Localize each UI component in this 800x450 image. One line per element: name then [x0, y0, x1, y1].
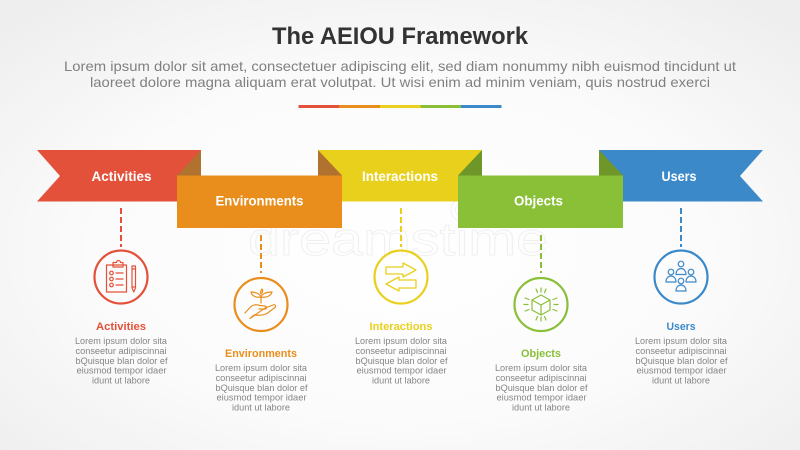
title: The AEIOU Framework: [272, 23, 529, 50]
text block: Interactions: Lorem ipsum dolor sita: [355, 336, 447, 346]
ribbon: Objects: [458, 176, 623, 228]
connector: Objects: [540, 235, 542, 273]
text block: Users: Users: [666, 321, 696, 333]
connector: Environments: [260, 235, 262, 273]
connector: Interactions: [400, 208, 402, 247]
subtitle text: Lorem ipsum dolor sit amet, consectetuer adipiscing elit, sed diam nonummy nibh euismod tincidunt ut: [64, 58, 736, 74]
text block: Activities: [75, 321, 168, 386]
text block: Users: eiusmod tempor idaer: [636, 366, 726, 376]
text block: Interactions: bQuisque blan dolor ef: [356, 356, 448, 366]
subtitle text: laoreet dolore magna aliquam erat volutpat. Ut wisi enim ad minim veniam, quis nostrud exerci: [90, 74, 710, 90]
text block: Environments: idunt ut labore: [232, 402, 290, 412]
text block: Environments: bQuisque blan dolor ef: [216, 383, 308, 393]
ribbon: Environments: Environments: [216, 194, 304, 208]
ribbon: Activities: [37, 150, 201, 202]
text block: Environments: Environments: [225, 348, 297, 360]
text block: Environments: Lorem ipsum dolor sita: [215, 363, 307, 373]
text block: Environments: [215, 348, 308, 412]
icon: clipboard checklist: [94, 250, 148, 304]
text block: Users: idunt ut labore: [652, 376, 710, 386]
text block: Objects: idunt ut labore: [512, 402, 570, 412]
text block: Objects: [495, 348, 588, 412]
text block: Objects: conseetur adipiscinnai: [496, 373, 586, 383]
ribbon: Interactions: [318, 150, 482, 202]
text block: Activities: conseetur adipiscinnai: [76, 346, 166, 356]
ribbon: Objects: Objects: [514, 194, 563, 208]
ribbon: Users: Users: [662, 169, 696, 184]
text block: Activities: eiusmod tempor idaer: [76, 366, 166, 376]
text block: Activities: Lorem ipsum dolor sita: [75, 336, 167, 346]
text block: Interactions: eiusmod tempor idaer: [356, 366, 446, 376]
icon: exchange arrows: [374, 250, 428, 304]
icon: group of users: [654, 250, 708, 304]
text block: Activities: bQuisque blan dolor ef: [76, 356, 168, 366]
text block: Users: conseetur adipiscinnai: [636, 346, 726, 356]
connector: Users: [680, 208, 682, 247]
ribbon: Environments: [177, 176, 342, 228]
text block: Activities: Activities: [96, 321, 146, 333]
text block: Users: bQuisque blan dolor ef: [636, 356, 728, 366]
text block: Objects: eiusmod tempor idaer: [496, 392, 586, 402]
rainbow divider: [298, 105, 502, 108]
ribbon: Users: [599, 150, 763, 202]
text block: Users: Lorem ipsum dolor sita: [635, 336, 727, 346]
text block: Interactions: Interactions: [370, 321, 432, 333]
text block: Objects: Objects: [521, 348, 561, 360]
text block: Interactions: [355, 321, 448, 386]
icon: glowing cube: [514, 278, 568, 331]
text block: Environments: conseetur adipiscinnai: [216, 373, 306, 383]
connector: Activities: [120, 208, 122, 247]
text block: Users: [635, 321, 728, 386]
text block: Activities: idunt ut labore: [92, 376, 150, 386]
icon: hand holding plant: [234, 278, 288, 331]
text block: Interactions: conseetur adipiscinnai: [356, 346, 446, 356]
text block: Objects: Lorem ipsum dolor sita: [495, 363, 587, 373]
text block: Objects: bQuisque blan dolor ef: [496, 383, 588, 393]
text: dreamstime: [248, 213, 548, 265]
text block: Environments: eiusmod tempor idaer: [216, 392, 306, 402]
text block: Interactions: idunt ut labore: [372, 376, 430, 386]
subtitle text: [64, 58, 736, 90]
ribbon: Activities: Activities: [92, 169, 152, 184]
ribbon: Interactions: Interactions: [362, 169, 438, 184]
